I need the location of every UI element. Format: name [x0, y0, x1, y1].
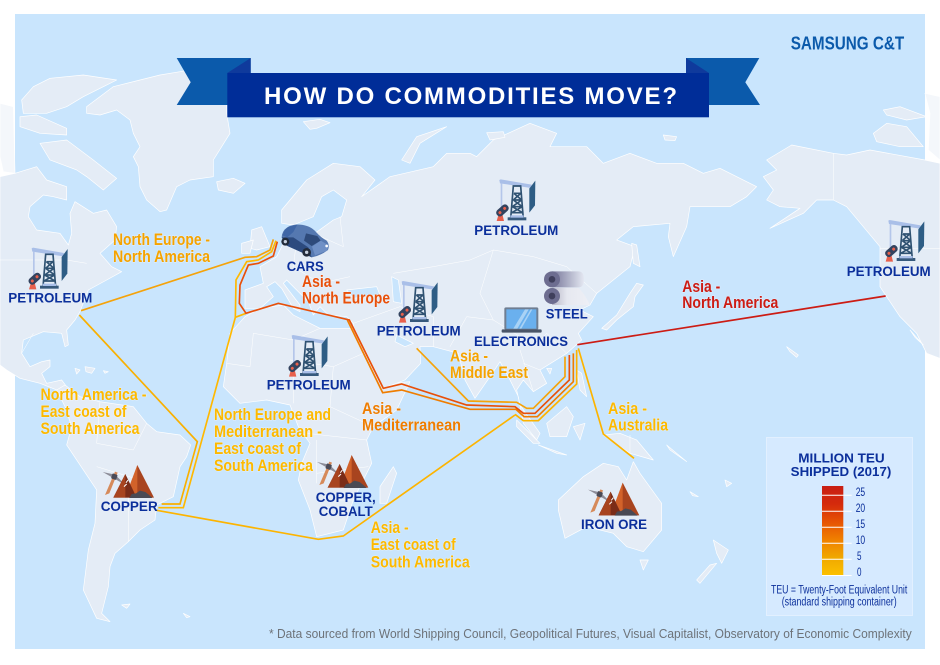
route label: North America - East coast of South America: South America	[40, 419, 140, 438]
legend title: SHIPPED (2017)	[791, 465, 891, 479]
route label: Asia - East coast of South America: South America	[371, 553, 470, 572]
legend colour scale	[822, 485, 865, 579]
route label: Asia - Mediterranean: Mediterranean	[362, 416, 461, 435]
icon: petroleum North America	[27, 248, 68, 289]
route: Asia - East coast trunk	[515, 350, 577, 421]
legend panel	[766, 438, 912, 616]
icon: steel rolls	[544, 271, 590, 305]
route label: Asia - East coast of South America: Asia -	[371, 518, 409, 537]
route label: Asia - Middle East: Asia -	[450, 347, 488, 366]
label: copper, cobalt	[316, 490, 376, 519]
legend colour scale: 15	[856, 517, 865, 531]
icon: copper cobalt Africa	[317, 455, 368, 488]
legend note: (standard shipping container)	[782, 597, 897, 609]
route label: Asia - North Europe	[302, 272, 390, 308]
route label: Asia - North Europe: North Europe	[302, 288, 390, 308]
label: iron ore: IRON ORE	[581, 517, 647, 532]
route label: Asia - North America	[682, 277, 779, 312]
route label: Asia - East coast of South America: East coast of	[371, 535, 456, 554]
route label: North America - East coast of South America: North America -	[40, 385, 146, 404]
icon: laptop	[502, 307, 542, 333]
label: petroleum: PETROLEUM	[377, 324, 461, 339]
route label: North Europe and Mediterranean - East coast of South America	[214, 405, 331, 475]
label: copper, cobalt: COBALT	[319, 504, 373, 519]
icon: iron ore Australia	[588, 483, 639, 516]
route: Asia - Australia	[578, 348, 634, 458]
legend note	[771, 584, 908, 609]
route label: Asia - North Europe: Asia -	[302, 272, 340, 291]
commodity labels	[8, 223, 931, 532]
icon: petroleum Russia	[495, 179, 535, 221]
route label: North Europe and Mediterranean - East coast of South America: South America	[214, 456, 313, 475]
legend colour scale: 5	[857, 549, 862, 563]
icon: copper South America	[103, 465, 154, 498]
logo: Samsung C&T: SAMSUNG C&T	[791, 33, 904, 53]
route label: North Europe - North America	[113, 230, 210, 266]
route label: Asia - Australia: Australia	[608, 416, 668, 435]
route label: North Europe and Mediterranean - East coast of South America: North Europe and	[214, 405, 331, 424]
decorative country borders	[0, 153, 940, 542]
label: petroleum: PETROLEUM	[267, 377, 351, 392]
route: North Europe - North America	[81, 239, 273, 311]
route label: North America - East coast of South America: East coast of	[40, 402, 127, 421]
route: Asia - Middle East	[417, 348, 565, 408]
icon: petroleum Middle East	[397, 281, 438, 323]
label: petroleum: PETROLEUM	[8, 291, 92, 306]
route: North America - East coast of South America	[79, 315, 197, 504]
route label: Asia - North America: Asia -	[682, 277, 720, 296]
route label: Asia - North America: North America	[682, 293, 779, 312]
route label: North Europe - North America: North America	[113, 247, 210, 266]
route: Asia - North America	[577, 296, 886, 345]
icon: car	[281, 225, 329, 257]
label: electronics: ELECTRONICS	[474, 334, 568, 349]
route: Asia - North Europe	[239, 242, 569, 413]
label: petroleum: PETROLEUM	[474, 223, 558, 238]
icon: petroleum West Coast	[884, 220, 924, 262]
legend title	[791, 452, 891, 479]
route label: Asia - Mediterranean	[362, 399, 461, 435]
label: steel: STEEL	[546, 306, 588, 321]
shipping routes	[79, 239, 886, 539]
route label: North Europe and Mediterranean - East coast of South America: East coast of	[214, 439, 301, 458]
label: cars: CARS	[287, 259, 324, 274]
route label: Asia - Middle East: Middle East	[450, 363, 528, 382]
label: petroleum: PETROLEUM	[847, 264, 931, 279]
legend colour scale: 25	[856, 485, 865, 499]
legend colour scale: 0	[857, 565, 862, 579]
title: HOW DO COMMODITIES MOVE?	[264, 83, 677, 110]
route label: North America - East coast of South America	[40, 385, 146, 438]
route: North Europe and Mediterranean - East coast of South America	[158, 241, 276, 508]
legend colour scale: 10	[856, 533, 865, 547]
label: copper, cobalt: COPPER,	[316, 490, 376, 505]
title ribbon	[177, 58, 760, 117]
route label: North Europe and Mediterranean - East coast of South America: Mediterranean -	[214, 422, 322, 441]
route: Mediterranean branch	[235, 313, 246, 317]
route label: Asia - Mediterranean: Asia -	[362, 399, 401, 418]
route label: Asia - Middle East	[450, 347, 528, 382]
route: Asia - East coast of South America	[157, 415, 515, 539]
icon: petroleum Africa	[287, 335, 328, 377]
route: Asia - Mediterranean	[347, 320, 573, 417]
route label: Asia - Australia	[608, 399, 668, 435]
route label: Asia - Australia: Asia -	[608, 399, 647, 418]
route labels	[40, 230, 779, 572]
route label: Asia - East coast of South America	[371, 518, 470, 572]
legend title: MILLION TEU	[798, 452, 885, 466]
route label: North Europe - North America: North Europe -	[113, 230, 210, 249]
legend colour scale: 20	[856, 501, 865, 515]
label: copper: COPPER	[101, 499, 158, 514]
